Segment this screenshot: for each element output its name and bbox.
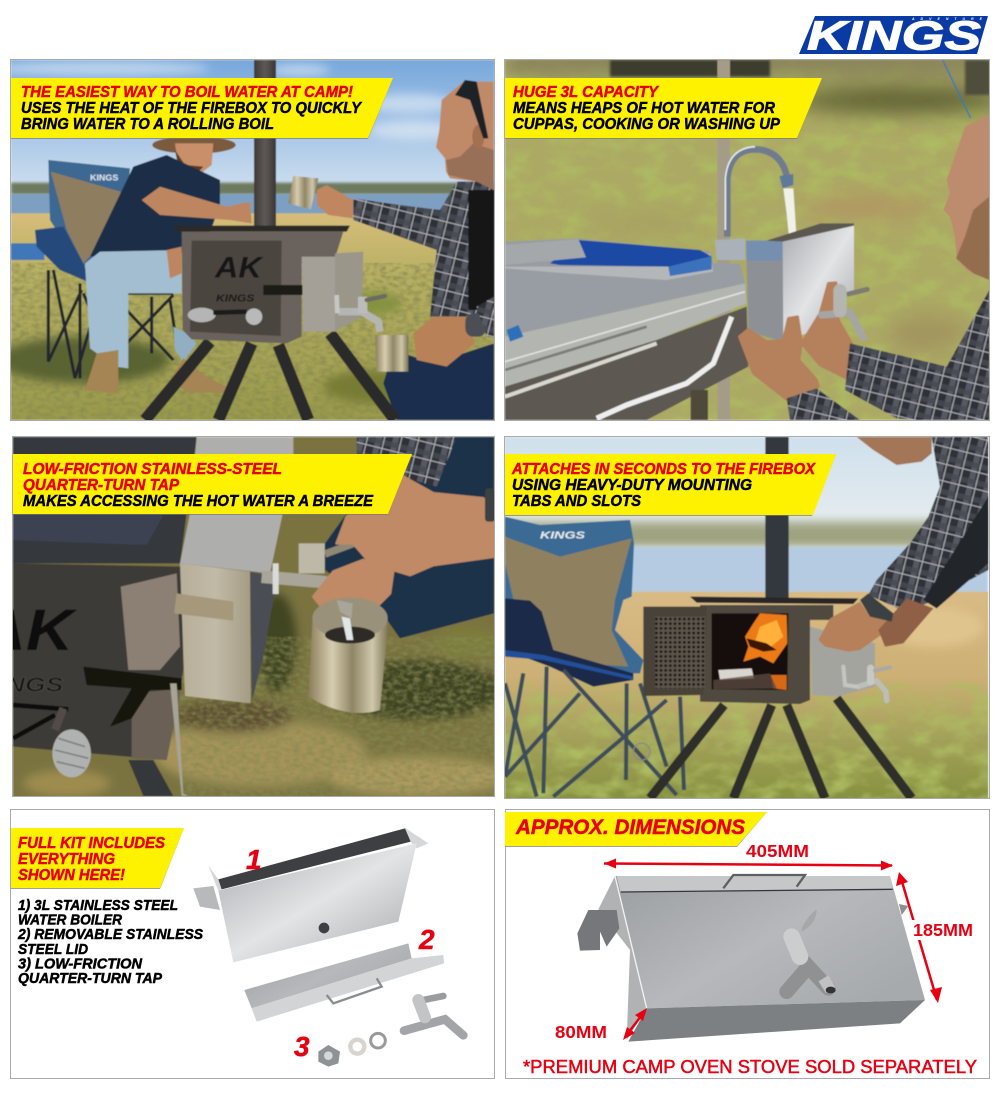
boiler xyxy=(174,437,293,703)
banner 2: CUPPAS, COOKING OR WASHING UP xyxy=(513,116,780,133)
stove legs xyxy=(145,333,395,420)
frame xyxy=(10,60,494,420)
label: 80mm: 80MM xyxy=(555,1022,607,1042)
stove xyxy=(0,437,197,796)
tap and washers xyxy=(318,996,463,1067)
left man xyxy=(85,136,252,393)
chair xyxy=(505,517,684,797)
hands xyxy=(313,477,494,607)
chair xyxy=(35,160,177,378)
banner 6 xyxy=(505,812,767,847)
stove xyxy=(643,597,858,704)
kit list: QUARTER-TURN TAP xyxy=(18,971,162,987)
faucet xyxy=(715,147,797,260)
flames xyxy=(743,613,787,690)
kit list: 1) 3L STAINLESS STEEL xyxy=(18,898,178,914)
panel background xyxy=(506,810,990,1078)
cup xyxy=(308,598,388,713)
frame xyxy=(12,436,494,796)
tap xyxy=(260,542,355,595)
logo: Adventure Kings: KINGS xyxy=(807,12,981,58)
chair: KINGS xyxy=(540,531,585,542)
banner 1: THE EASIEST WAY TO BOIL WATER AT CAMP! xyxy=(21,84,354,101)
pole xyxy=(717,60,730,420)
kit list: WATER BOILER xyxy=(18,912,122,928)
lid product xyxy=(244,943,444,1022)
label: 405mm: 405MM xyxy=(746,841,809,861)
kit list xyxy=(17,898,203,987)
banner 3: LOW-FRICTION STAINLESS-STEEL xyxy=(23,461,282,478)
panel: huge 3L capacity xyxy=(504,50,1000,420)
banner 5: SHOWN HERE! xyxy=(18,867,126,884)
panel: approx dimensions xyxy=(505,810,990,1078)
banner 4: USING HEAVY-DUTY MOUNTING xyxy=(512,477,752,494)
stove pole xyxy=(254,60,276,227)
number 1: 1 xyxy=(246,844,262,875)
banner 3: MAKES ACCESSING THE HOT WATER A BREEZE xyxy=(23,493,374,510)
number 3: 3 xyxy=(294,1031,310,1062)
arrow: 185mm xyxy=(896,872,942,1003)
shirt xyxy=(845,290,989,420)
boiler product xyxy=(193,823,428,962)
kit list: 3) LOW-FRICTION xyxy=(18,956,143,972)
panel background xyxy=(10,810,494,1078)
frame xyxy=(504,436,990,798)
panel: quarter-turn tap xyxy=(0,436,507,797)
stove body: KINGS xyxy=(216,293,255,304)
arrow: 405mm xyxy=(604,858,893,870)
boiler tap xyxy=(822,289,867,337)
chair: KINGS xyxy=(90,173,119,183)
pole xyxy=(765,437,789,599)
photo: men at camp with stove xyxy=(0,60,494,420)
banner 3: QUARTER-TURN TAP xyxy=(23,477,179,494)
banner 4 xyxy=(505,454,836,516)
stove body: AK xyxy=(214,251,264,284)
banner 5 xyxy=(11,828,184,889)
banner 2 xyxy=(505,78,822,139)
arrow: 80mm xyxy=(623,1008,647,1040)
legs xyxy=(650,698,912,798)
banner 1: USES THE HEAT OF THE FIREBOX TO QUICKLY xyxy=(21,100,362,117)
banner 2: HUGE 3L CAPACITY xyxy=(513,84,659,101)
boiler with tap xyxy=(577,875,925,1042)
banner 6: APPROX. DIMENSIONS xyxy=(515,816,745,839)
boiler xyxy=(746,223,854,342)
right man xyxy=(288,80,494,420)
boiler xyxy=(810,627,890,701)
frame xyxy=(504,60,990,420)
banner 2: MEANS HEAPS OF HOT WATER FOR xyxy=(513,100,775,117)
hands xyxy=(739,283,852,399)
jeans xyxy=(325,437,494,638)
banner 1 xyxy=(11,78,393,139)
photo: attaching boiler to firebox xyxy=(505,437,988,800)
photo: filling boiler from faucet xyxy=(505,50,1000,420)
head xyxy=(943,115,989,280)
number 2: 2 xyxy=(418,924,435,955)
stove body xyxy=(173,226,385,343)
banner 5: FULL KIT INCLUDES xyxy=(18,835,165,852)
bench xyxy=(505,238,748,420)
logo: Adventure Kings: ADVENTURE xyxy=(911,17,983,21)
man xyxy=(818,437,988,652)
panel: easiest way to boil water xyxy=(0,60,495,420)
panel: attaches in seconds xyxy=(504,436,990,800)
footnote: *PREMIUM CAMP OVEN STOVE SOLD SEPARATELY xyxy=(523,1056,977,1077)
banner 1: BRING WATER TO A ROLLING BOIL xyxy=(21,116,274,133)
banner 4: ATTACHES IN SECONDS TO THE FIREBOX xyxy=(511,461,816,478)
banner 3 xyxy=(13,454,412,515)
label: 185mm: 185MM xyxy=(913,920,973,940)
photo: pouring from tap into cup xyxy=(0,437,507,797)
kit list: 2) REMOVABLE STAINLESS xyxy=(17,927,203,943)
kit list: STEEL LID xyxy=(18,942,88,958)
banner 4: TABS AND SLOTS xyxy=(512,493,641,510)
panel: full kit xyxy=(10,810,494,1078)
banner 5: EVERYTHING xyxy=(18,851,115,868)
logo: Adventure Kings xyxy=(799,12,988,58)
